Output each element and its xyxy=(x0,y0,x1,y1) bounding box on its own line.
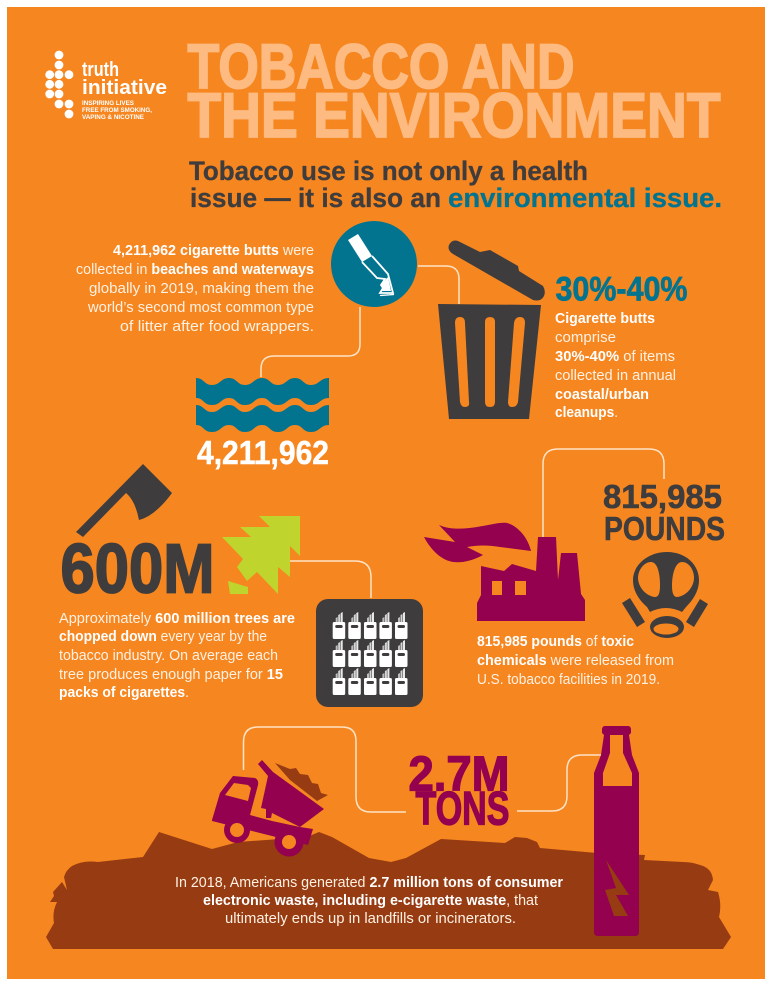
text: cigarette butts collected: 4,211,962 cigarette butts were xyxy=(113,243,314,259)
subtitle: issue — it is also an xyxy=(190,183,441,213)
text: e-waste: In 2018, Americans generated 2.7 million tons of consumer xyxy=(175,875,563,891)
text: cigarette butts comprise: 30%-40% of items xyxy=(555,349,675,365)
text: cigarette butts comprise: coastal/urban xyxy=(555,387,649,403)
text: cigarette butts comprise: Cigarette butts xyxy=(555,311,655,327)
text: toxic chemicals xyxy=(477,634,674,688)
subtitle: Tobacco use is not only a health xyxy=(189,156,588,186)
text: toxic chemicals: chemicals were released from xyxy=(477,653,674,669)
text: e-waste: ultimately ends up in landfills or incinerators. xyxy=(225,911,516,927)
icon: e-cigarette bottle xyxy=(594,726,639,936)
subtitle: environmental issue. xyxy=(448,183,722,213)
title xyxy=(188,32,721,151)
text: cigarette butts collected: collected in beaches and waterways xyxy=(76,262,314,278)
subtitle xyxy=(189,156,722,213)
text: cigarette butts comprise: comprise xyxy=(555,330,616,346)
logo: truth initiative: INSPIRING LIVES xyxy=(82,101,134,107)
landfill silhouette xyxy=(46,832,731,949)
stat: 2.7M tons xyxy=(408,748,510,834)
icon: gas mask xyxy=(622,552,708,638)
text: toxic chemicals: U.S. tobacco facilities in 2019. xyxy=(477,672,660,688)
icon: axe xyxy=(76,464,172,537)
text: 600 million trees xyxy=(59,611,295,701)
text: 600 million trees: tobacco industry. On average each xyxy=(59,648,278,664)
text: cigarette butts collected: globally in 2019, making them the xyxy=(89,281,314,297)
icon: factory with smoke xyxy=(424,523,585,621)
icon: water waves xyxy=(196,378,329,432)
logo: truth initiative xyxy=(45,51,167,121)
logo: truth initiative: initiative xyxy=(82,77,167,99)
icon: cigarette packs box xyxy=(316,599,423,707)
icon: felled tree xyxy=(222,516,300,594)
stat: 815,985 pounds: 815,985 xyxy=(603,478,722,515)
logo: truth initiative: VAPING & NICOTINE xyxy=(82,115,144,121)
text: cigarette butts comprise xyxy=(555,311,676,421)
icon: trash can xyxy=(438,240,545,419)
stat: 600M: 600M xyxy=(60,530,214,608)
stat: 2.7M tons: 2.7M xyxy=(408,748,510,802)
text: cigarette butts comprise: cleanups. xyxy=(555,405,618,421)
text: 600 million trees: tree produces enough paper for 15 xyxy=(59,667,283,683)
text: 600 million trees: Approximately 600 million trees are xyxy=(59,611,295,627)
text: cigarette butts comprise: collected in annual xyxy=(555,368,676,384)
stat: 2.7M tons: TONS xyxy=(416,782,510,834)
text: cigarette butts collected: of litter after food wrappers. xyxy=(120,319,314,335)
text: cigarette butts collected: world’s second most common type xyxy=(87,300,314,316)
text: e-waste xyxy=(175,875,563,927)
title: TOBACCO AND xyxy=(188,32,574,102)
icon: dump truck xyxy=(212,760,328,856)
text: e-waste: electronic waste, including e-cigarette waste, that xyxy=(203,893,538,909)
connector lines xyxy=(244,266,664,812)
text: 600 million trees: chopped down every year by the xyxy=(59,629,267,645)
number: 4,211,962: 4,211,962 xyxy=(197,434,329,471)
stat: 815,985 pounds: POUNDS xyxy=(604,510,725,547)
text: 600 million trees: packs of cigarettes. xyxy=(59,685,189,701)
logo: truth initiative: truth xyxy=(82,59,119,81)
stat: 815,985 pounds xyxy=(603,478,725,547)
icon: cigarette butt in circle xyxy=(331,221,417,307)
logo: truth initiative: FREE FROM SMOKING, xyxy=(82,108,152,114)
stat: 30%-40%: 30%-40% xyxy=(556,270,688,308)
text: cigarette butts collected xyxy=(76,243,314,335)
text: toxic chemicals: 815,985 pounds of toxic xyxy=(477,634,634,650)
